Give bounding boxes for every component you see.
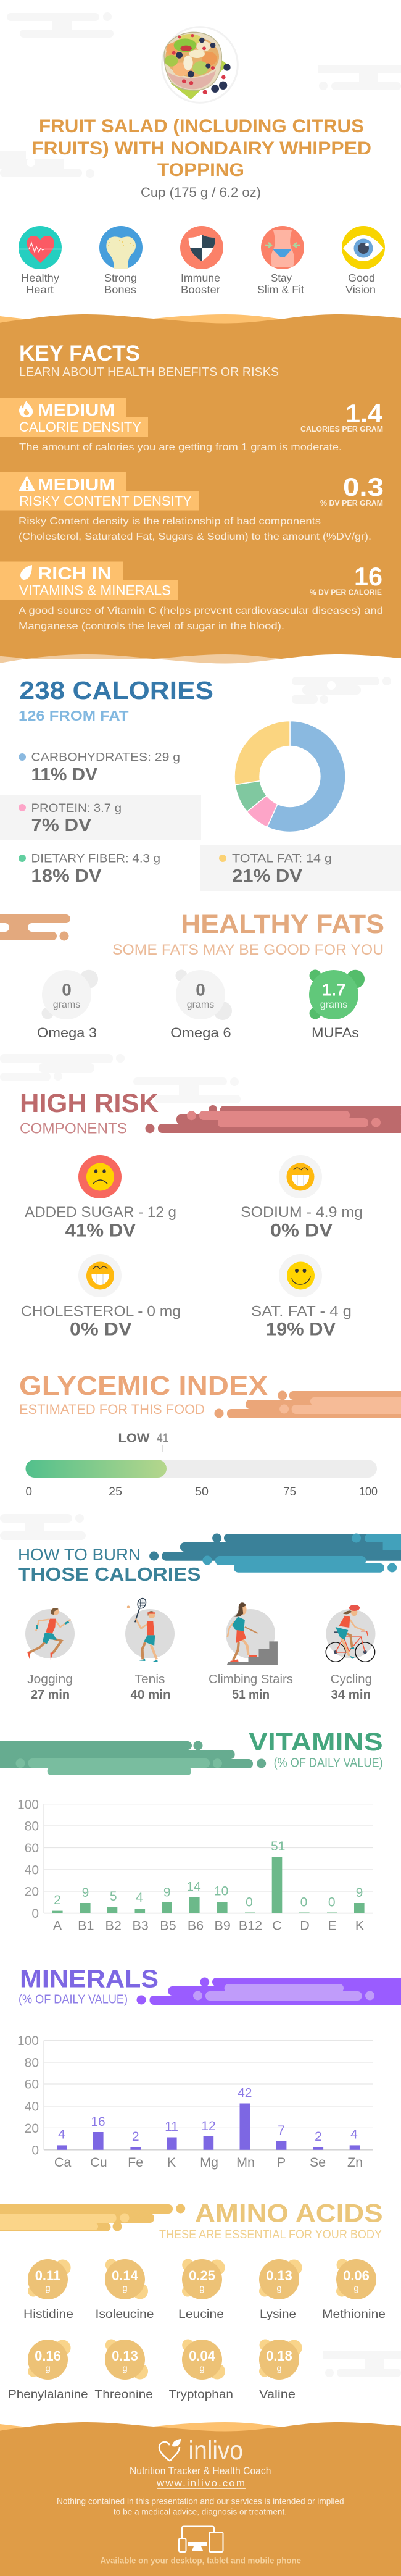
gauge scale [26,1486,378,1499]
availability note: Available on your desktop, tablet and mobile phone [100,2556,301,2566]
fat: omega 3: grams [53,1000,80,1010]
bar chart: minerals: P [277,2155,286,2170]
logo: heart and leaf [159,2439,181,2461]
bar chart: vitamins: 80 [25,1820,39,1834]
title: TOPPING [157,160,244,180]
bar chart: vitamins: 51 [271,1839,285,1854]
bar chart: vitamins: 14 [186,1880,201,1894]
bar chart: minerals: K [167,2155,176,2170]
amino acid: threonine: Threonine [94,2388,153,2401]
nutrient: carbohydrates: 11% DV [31,765,98,785]
tagline: Nutrition Tracker & Health Coach [130,2465,271,2477]
amino acid: methionine: 0.06 [343,2268,370,2283]
bar chart: vitamins: 0 [300,1896,307,1909]
label: strong bones: Strong [104,272,137,284]
label: tennis: 40 min [131,1688,170,1702]
disclaimer [57,2496,344,2517]
label: strong bones: Bones [104,283,136,296]
description: Manganese (controls the level of sugar in the blood). [19,621,284,632]
bar chart: minerals: 0 [31,2143,39,2157]
gauge scale: 100 [359,1486,378,1499]
bar chart: minerals: 60 [25,2078,39,2092]
gauge scale: 75 [283,1486,296,1499]
amino acid: valine: Valine [259,2388,296,2401]
website: www.inlivo.com [156,2477,245,2489]
amino acid: methionine: Methionine [322,2308,386,2321]
fat: omega 6: grams [187,1000,214,1010]
nutrient: carbohydrates: CARBOHYDRATES: 29 g [31,751,180,764]
panel: high risk [20,1089,401,1339]
value: 0.3 [343,472,384,501]
fact name: CALORIE DENSITY [19,419,141,435]
bar chart: minerals: 11 [165,2120,178,2134]
label: immune booster: Immune [181,272,220,284]
label: healthy heart [21,272,59,296]
heading: key facts: KEY FACTS [19,341,140,366]
title: FRUITS) WITH NONDAIRY WHIPPED [31,138,371,159]
label: cycling [331,1673,372,1702]
risk: saturated fat: 19% DV [266,1319,336,1339]
bar chart: minerals: Zn [347,2155,363,2170]
label: stay slim and fit [257,272,304,296]
amino acid: lysine: g [276,2283,282,2293]
description: (Cholesterol, Saturated Fat, Sugars & Sodium) to the amount (%DV/gr). [19,532,371,542]
label: stay slim and fit: Slim & Fit [257,283,304,296]
bar chart: minerals: 20 [25,2122,39,2136]
fact name: VITAMINS & MINERALS [19,583,171,598]
risk: sodium: SODIUM - 4.9 mg [241,1204,363,1221]
subheading: COMPONENTS [20,1121,127,1137]
bar chart: vitamins: 10 [214,1884,228,1899]
rating: RICH IN [38,564,112,583]
value: 16 [354,562,382,591]
bar chart: minerals: 16 [91,2115,105,2129]
nutrient: carbohydrates [19,751,180,785]
amino acid: isoleucine: g [122,2283,128,2293]
label: healthy heart: Heart [26,283,54,296]
bar chart: minerals: 2 [132,2130,139,2144]
nutrient: dietary fiber: 18% DV [31,866,102,886]
amino acid: isoleucine: 0.14 [112,2268,139,2283]
bar chart: vitamins [17,1797,373,1933]
donut chart [234,721,345,832]
bar chart: minerals: Se [310,2155,326,2170]
bar chart: vitamins: B9 [215,1918,231,1933]
risk: added sugar [25,1155,176,1240]
nutrient: protein [19,802,122,835]
subheading: SOME FATS MAY BE GOOD FOR YOU [112,942,384,958]
icon: good vision eye [342,226,385,269]
nutrient: total fat: TOTAL FAT: 14 g [232,853,332,866]
bar chart: vitamins: A [53,1918,62,1933]
amino acid: threonine [94,2339,153,2401]
risk: sodium [241,1155,363,1240]
fat: mufas: MUFAs [312,1025,359,1040]
description: Risky Content density is the relationship of bad components [19,516,321,527]
header decoration [146,1105,401,1133]
bar chart: vitamins: 0 [31,1907,39,1921]
amino acid: tryptophan: g [199,2364,205,2373]
amino acid: threonine: 0.13 [112,2348,138,2364]
icon: healthy heart [19,226,62,269]
amino acid: methionine [322,2259,386,2321]
header decoration [0,1741,266,1775]
heading line 2: THOSE CALORIES [18,1563,201,1585]
unit: % DV PER GRAM [320,498,383,508]
amino acid: histidine [23,2259,73,2321]
risk: saturated fat: SAT. FAT - 4 g [251,1303,352,1320]
bar chart: minerals: Mn [236,2155,255,2170]
header decoration [137,1977,401,2005]
amino acid: threonine: g [122,2364,128,2373]
icon: tennis [125,1597,175,1662]
fat: omega 3 [37,970,98,1040]
bar chart: vitamins: 2 [54,1893,61,1907]
bar chart: minerals: 40 [25,2100,39,2114]
nutrient: protein: PROTEIN: 3.7 g [31,802,122,815]
bar chart: vitamins: 0 [328,1896,336,1909]
value: 1.4 [345,399,383,428]
serving size: Cup (175 g / 6.2 oz) [141,185,261,200]
label: healthy heart: Healthy [21,272,59,284]
bar chart: minerals: Mg [200,2155,218,2170]
header decoration [0,914,70,941]
panel: key facts [0,314,401,663]
label: stay slim and fit: Stay [271,272,292,284]
nutrient: dietary fiber: DIETARY FIBER: 4.3 g [31,853,160,866]
amino acid: tryptophan [169,2339,233,2401]
panel: health benefit icons [19,226,385,296]
fat: mufas [309,969,365,1040]
fat: omega 6: Omega 6 [170,1025,231,1040]
amino acid: tryptophan: Tryptophan [169,2388,233,2401]
bar chart: vitamins: 4 [136,1891,143,1905]
title [31,116,371,180]
amino acid: histidine: Histidine [23,2308,73,2321]
risk: sodium: 0% DV [270,1220,333,1240]
bar chart: minerals: 100 [17,2034,39,2048]
panel: glycemic index [19,1371,401,1499]
bar chart: vitamins: 40 [25,1863,39,1877]
disclaimer: Nothing contained in this presentation and our services is intended or implied [57,2496,344,2506]
icon: stay slim and fit [261,226,304,269]
amino acid: leucine: 0.25 [189,2268,215,2283]
bar chart: minerals: 80 [25,2056,39,2070]
risk: added sugar: 41% DV [65,1220,136,1240]
background decoration: header clouds [0,12,401,178]
label: tennis [131,1673,170,1702]
icon: warning triangle [19,475,35,491]
bar chart: vitamins: E [328,1918,337,1933]
heading: glycemic index: GLYCEMIC INDEX [19,1371,268,1401]
bar chart: vitamins: B6 [188,1918,204,1933]
fact: calorie density [0,398,383,453]
bar chart: vitamins: B12 [239,1918,262,1933]
panel: footer [0,2422,401,2576]
bar chart: minerals: Fe [128,2155,143,2170]
gauge scale: 50 [195,1486,209,1499]
risk: cholesterol: 0% DV [70,1319,132,1339]
amino acid: lysine: 0.13 [266,2268,292,2283]
risk: cholesterol [21,1254,181,1339]
panel: vitamins [0,1727,383,1933]
fat: mufas: 1.7 [322,981,345,1000]
food photo: fruit salad bowl [162,27,238,102]
fat: omega 6 [170,969,232,1040]
subheading: ESTIMATED FOR THIS FOOD [19,1402,205,1417]
bar chart: vitamins: 5 [110,1889,117,1904]
amino acid: leucine: Leucine [178,2308,224,2321]
nutrient: dietary fiber [19,853,160,886]
header decoration [149,1534,401,1573]
bar chart: minerals: 4 [58,2128,65,2142]
logo: wordmark: inlivo [189,2436,243,2465]
amino acid: leucine: g [199,2283,205,2293]
bar chart: minerals [17,2034,373,2170]
amino acid: phenylalanine: 0.16 [35,2348,61,2364]
label: strong bones [104,272,137,296]
icon: jogging [25,1608,75,1660]
bar chart: vitamins: 0 [246,1896,253,1909]
fact: risky content density [0,472,384,542]
bar chart: vitamins: D [300,1918,310,1933]
header decoration [215,1390,401,1418]
bar chart: minerals: Ca [54,2155,71,2170]
bar chart: vitamins: 100 [17,1797,39,1812]
amino acid: histidine: 0.11 [35,2268,60,2283]
heading line 1: HOW TO BURN [18,1545,141,1564]
bar chart: minerals: 42 [238,2086,252,2100]
panel: amino acids [0,2199,386,2401]
bar chart: vitamins: 9 [163,1885,171,1899]
subheading: THESE ARE ESSENTIAL FOR YOUR BODY [159,2228,382,2241]
heading: vitamins: VITAMINS [249,1727,383,1756]
disclaimer: to be a medical advice, diagnosis or treatment. [114,2507,287,2517]
amino acid: isoleucine [95,2259,154,2321]
amino acid: lysine: Lysine [260,2308,296,2321]
fat: omega 3: Omega 3 [37,1025,97,1040]
heading: amino acids: AMINO ACIDS [195,2199,383,2228]
heading: 238 calories: 238 CALORIES [20,676,213,705]
label: climbing stairs: 51 min [232,1688,270,1702]
subheading: key facts: LEARN ABOUT HEALTH BENEFITS OR RISKS [19,366,279,379]
amino acid: phenylalanine: g [45,2364,51,2373]
amino acid: leucine [178,2259,225,2321]
icon: cycling [326,1605,375,1662]
label: climbing stairs: Climbing Stairs [209,1673,293,1686]
subheading: (% OF DAILY VALUE) [274,1757,383,1770]
bar chart: vitamins: B2 [105,1918,122,1933]
bar chart: vitamins: B5 [160,1918,176,1933]
amino acid: valine: 0.18 [266,2348,292,2364]
header decoration [0,2204,185,2231]
risk: added sugar: ADDED SUGAR - 12 g [25,1204,176,1221]
amino acid: lysine [259,2259,302,2321]
bar chart: vitamins: B3 [132,1918,149,1933]
gauge bar [26,1460,377,1478]
background decoration: calories cloud [292,677,391,704]
icon: immune booster shield [180,226,223,269]
icon: flame [19,401,33,417]
description: A good source of Vitamin C (helps prevent cardiovascular diseases) and [19,606,383,616]
unit: CALORIES PER GRAM [300,424,383,433]
fact: vitamins and minerals [0,562,383,632]
title: FRUIT SALAD (INCLUDING CITRUS [39,116,364,136]
risk: cholesterol: CHOLESTEROL - 0 mg [21,1303,181,1320]
label: good vision [345,272,376,296]
label: jogging [27,1673,73,1702]
bar chart: minerals: 2 [315,2130,322,2144]
label: jogging: Jogging [27,1673,73,1686]
description: The amount of calories you are getting from 1 gram is moderate. [19,442,342,453]
fat: omega 6: 0 [196,981,205,1000]
nutrient: total fat: 21% DV [232,866,303,886]
label: immune booster: Booster [181,283,220,296]
amino acid: phenylalanine [8,2340,88,2401]
unit: % DV PER CALORIE [310,588,382,596]
bar chart: vitamins: 9 [356,1886,363,1900]
bar chart: vitamins: B1 [78,1918,94,1933]
rating: MEDIUM [38,475,115,494]
heading: healthy fats: HEALTHY FATS [181,910,384,939]
rating: MEDIUM [38,400,115,419]
nutrient row backgrounds [0,795,401,891]
fact name: RISKY CONTENT DENSITY [19,493,192,509]
fat: omega 3: 0 [62,981,72,1000]
bar chart: vitamins: C [272,1918,282,1933]
label: good vision: Good [348,272,375,284]
bar chart: minerals: 12 [201,2119,216,2133]
heading: high risk: HIGH RISK [20,1089,159,1118]
panel: calories [0,676,401,891]
amino acid: phenylalanine: Phenylalanine [8,2388,88,2401]
bar chart: minerals: Cu [90,2155,107,2170]
background decoration: cloud beside amino acids [323,2351,401,2377]
background decoration: cloud above burn section [0,1514,86,1540]
amino acid: histidine: g [45,2283,51,2293]
bar chart: minerals: 4 [350,2128,358,2142]
amino acid: methionine: g [353,2283,359,2293]
subheading: from fat: 126 FROM FAT [19,708,128,724]
icon: climbing stairs [226,1602,278,1665]
icon: desktop, tablet and phone [179,2527,223,2552]
amino acid: isoleucine: Isoleucine [95,2308,154,2321]
panel: minerals [17,1965,401,2170]
icon: leaf [20,565,32,580]
amino acid: valine [259,2339,302,2401]
label: good vision: Vision [345,283,376,296]
heading: minerals: MINERALS [20,1965,159,1993]
nutrient: protein: 7% DV [31,816,92,835]
value label [118,1432,169,1452]
bar chart: vitamins: 20 [25,1885,39,1899]
gauge scale: 0 [26,1486,32,1499]
bar chart: vitamins: 9 [82,1886,89,1900]
bar chart: minerals: 7 [278,2123,285,2138]
fat: mufas: grams [320,1000,347,1010]
panel: healthy fats [0,910,384,1040]
label: tennis: Tenis [134,1673,165,1686]
label: climbing stairs [209,1673,293,1702]
value label: LOW [118,1432,150,1445]
nutrient: total fat [219,853,332,886]
label: cycling: 34 min [331,1688,371,1702]
description [19,606,383,632]
gauge scale: 25 [109,1486,122,1499]
panel: how to burn those calories [18,1534,401,1702]
subheading: (% OF DAILY VALUE) [19,1993,128,2007]
bar chart: vitamins: K [355,1918,365,1933]
description [19,516,371,542]
label: jogging: 27 min [31,1688,70,1702]
bar chart: vitamins: 60 [25,1841,39,1855]
background decoration: clouds above high risk [0,1054,241,1103]
value label: 41 [157,1432,169,1445]
icon: strong bones [99,226,143,269]
amino acid: tryptophan: 0.04 [189,2348,216,2364]
label: cycling: Cycling [331,1673,372,1686]
label: immune booster [181,272,220,296]
amino acid: valine: g [276,2364,282,2373]
risk: saturated fat [251,1254,352,1339]
